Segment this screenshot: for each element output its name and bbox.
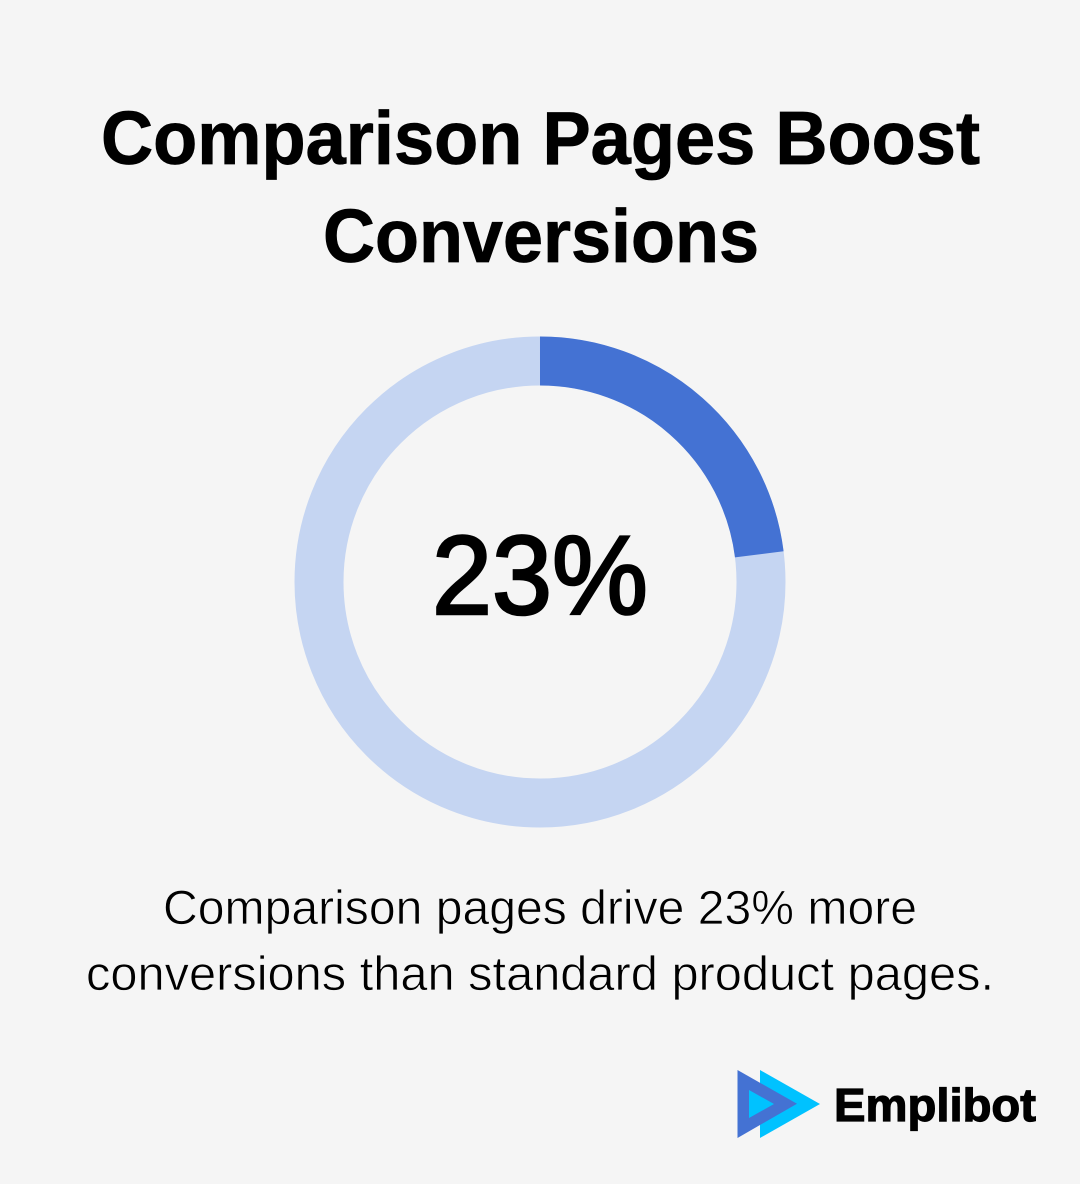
title: Comparison Pages Boost [101,96,980,180]
title [101,96,980,278]
logo wordmark: Emplibot [834,1079,1036,1131]
donut track [319,361,761,803]
logo: Emplibot [738,1070,1036,1138]
description text: Comparison pages drive 23% more [163,882,917,935]
donut value segment [540,361,759,554]
donut chart: 23% [319,361,761,803]
description text: conversions than standard product pages. [86,948,994,1001]
center value: 23% [432,513,648,638]
description text [86,882,994,1001]
icon: play triangles [738,1070,820,1138]
title: Conversions [323,194,759,278]
